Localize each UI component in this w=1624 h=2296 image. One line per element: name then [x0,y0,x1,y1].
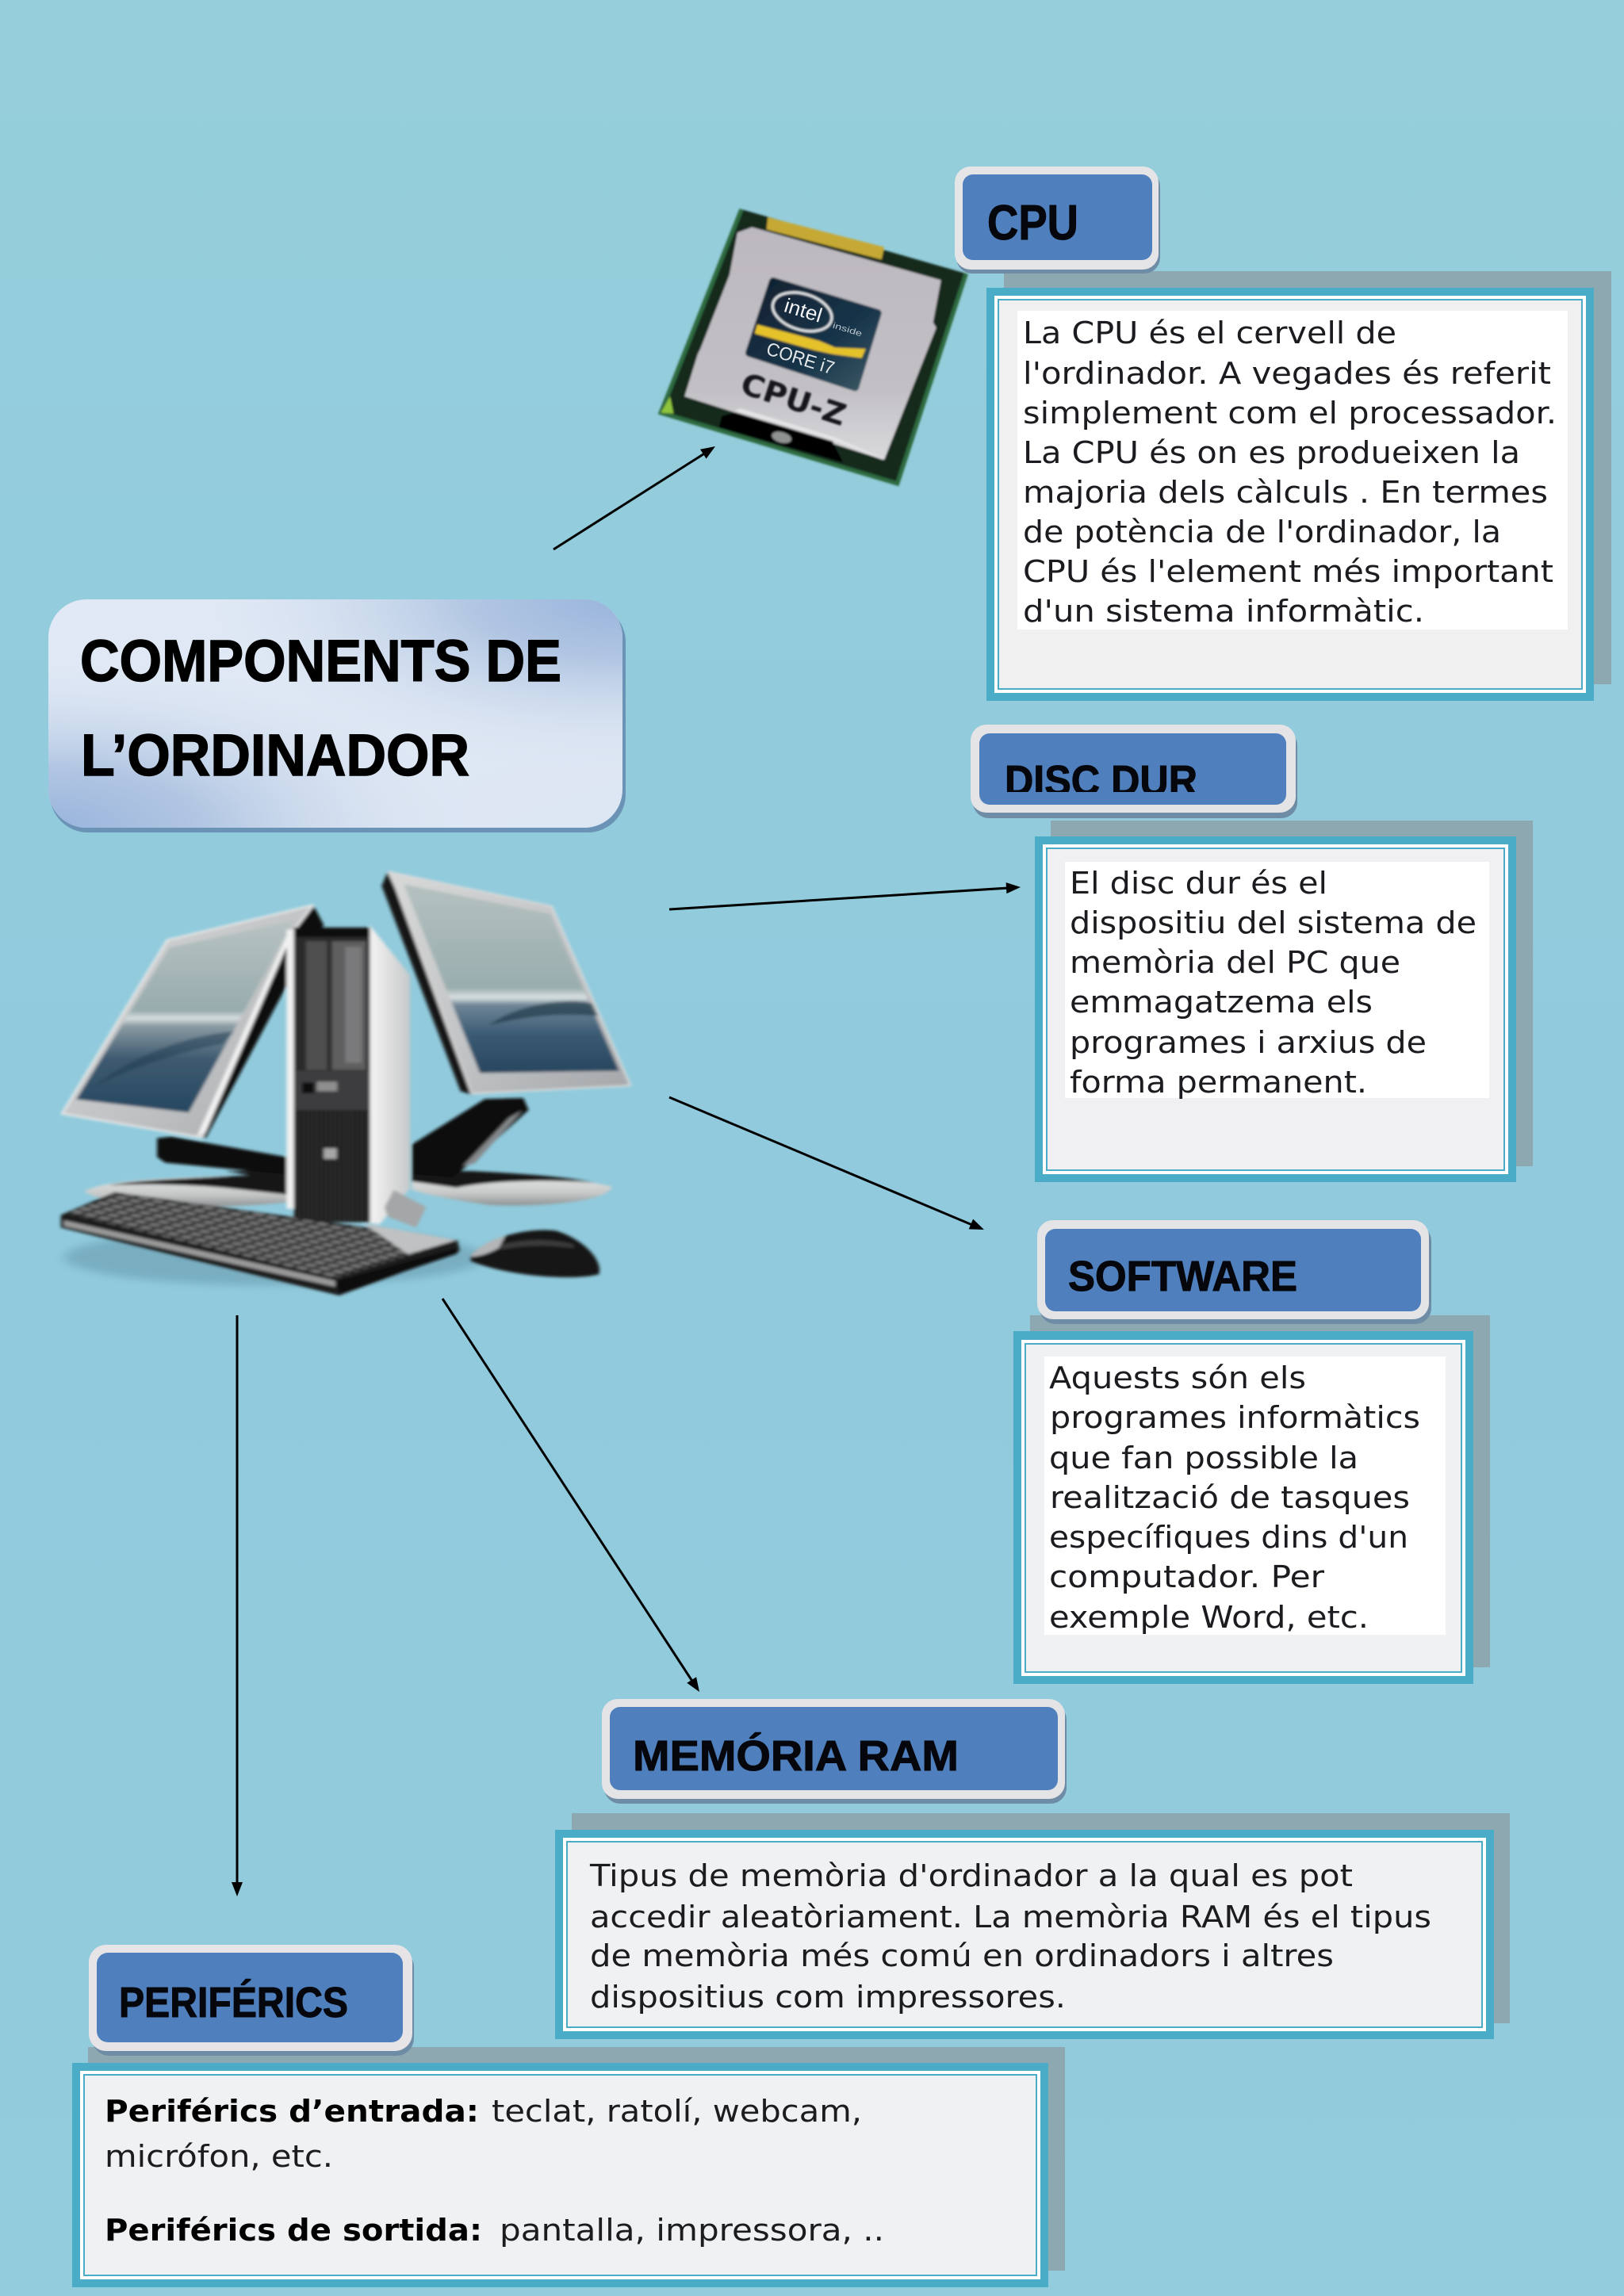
CPU description: La CPU és el cervell de [1023,316,1396,350]
title text: L’ORDINADOR [81,722,469,788]
text background [1017,311,1568,629]
arrow: to peripherals [232,1315,243,1896]
software description: programes informàtics [1050,1400,1420,1435]
peripherals description [105,2094,884,2248]
chip label: Core i7: CORE i7 [764,339,837,378]
heading: CPU: CPU [987,196,1078,251]
CPU description: majoria dels càlculs . En termes [1023,475,1548,510]
panel shadow [1030,1315,1490,1667]
heading: hard disk: DISC DUR [1005,757,1197,805]
hard disk description [1070,866,1477,1100]
hard disk description: memòria del PC que [1070,945,1400,980]
peripherals description: micrófon, etc. [105,2139,333,2174]
panel frame [72,2063,1048,2287]
panel: CPU [986,271,1611,701]
hard disk description: El disc dur és el [1070,866,1327,901]
panel frame [986,288,1594,701]
arrow: to hard disk [669,882,1021,909]
software description: exemple Word, etc. [1049,1600,1369,1635]
heading: software [1037,1220,1431,1324]
title box [48,599,626,832]
peripherals description: Periférics d’entrada: [105,2094,479,2129]
text background [1044,1357,1446,1635]
heading: CPU [955,166,1160,274]
right monitor [381,872,477,1095]
panel: hard disk [1035,821,1533,1182]
CPU description: d'un sistema informàtic. [1023,594,1424,629]
panel: RAM [555,1813,1510,2039]
soft drop shadow [64,1229,485,1285]
RAM description [589,1858,1431,2015]
hard disk description: dispositiu del sistema de [1070,905,1477,940]
left base [84,1176,286,1207]
panel: software [1013,1315,1490,1684]
software description [1049,1360,1420,1635]
heading: peripherals: PERIFÉRICS [119,1979,348,2026]
software description: computador. Per [1049,1559,1324,1594]
tower [370,925,410,1224]
title text [80,628,561,788]
panel frame [555,1830,1494,2039]
chip label: inside: inside [831,321,864,339]
panel: peripherals [72,2047,1065,2287]
software description: específiques dins d'un [1049,1520,1408,1555]
arrow: to CPU [553,446,715,549]
panel frame [1035,836,1516,1182]
peripherals description: teclat, ratolí, webcam, [492,2094,862,2129]
right base [412,1175,612,1205]
CPU description: simplement com el processador. [1023,396,1557,430]
software description: realització de tasques [1050,1480,1410,1515]
CPU description: CPU és l'element més important [1023,554,1553,589]
panel shadow [1051,821,1533,1166]
panel shadow [572,1813,1510,2023]
RAM description: de memòria més comú en ordinadors i altres [590,1938,1334,1973]
software description: Aquests són els [1049,1360,1306,1395]
peripherals description: pantalla, impressora, .. [500,2213,884,2248]
panel frame [1013,1331,1473,1684]
chip label: intel: intel [782,295,825,327]
panel shadow [1004,271,1611,684]
keyboard [61,1192,460,1295]
CPU description [1023,316,1557,629]
peripherals description: Periférics de sortida: [105,2213,482,2248]
panel shadow [88,2047,1065,2271]
CPU description: La CPU és on es produeixen la [1023,435,1520,470]
heading: hard disk [971,725,1297,818]
RAM description: accedir aleatòriament. La memòria RAM és el tipus [590,1900,1431,1934]
hard disk description: emmagatzema els [1070,985,1373,1020]
chip label: CPU-Z: CPU-Z [737,366,850,433]
mouse [470,1230,599,1277]
arrow: to RAM [442,1299,699,1692]
arrow: to software [669,1097,984,1230]
RAM description: Tipus de memòria d'ordinador a la qual es pot [589,1858,1353,1893]
title text: COMPONENTS DE [80,628,561,694]
software description: que fan possible la [1049,1441,1358,1475]
heading: RAM: MEMÓRIA RAM [633,1732,959,1780]
heading: software: SOFTWARE [1068,1253,1297,1300]
CPU description: de potència de l'ordinador, la [1023,515,1501,549]
heading: RAM [602,1699,1067,1804]
text background [1065,862,1489,1098]
left monitor [193,905,324,1138]
hard disk description: programes i arxius de [1070,1025,1427,1060]
hard disk description: forma permanent. [1070,1065,1367,1100]
icon: CPU chip [661,209,966,484]
CPU description: l'ordinador. A vegades és referit [1023,356,1551,391]
icon: desktop computer [61,872,630,1295]
RAM description: dispositius com impressores. [590,1980,1066,2015]
heading: peripherals [89,1945,414,2056]
